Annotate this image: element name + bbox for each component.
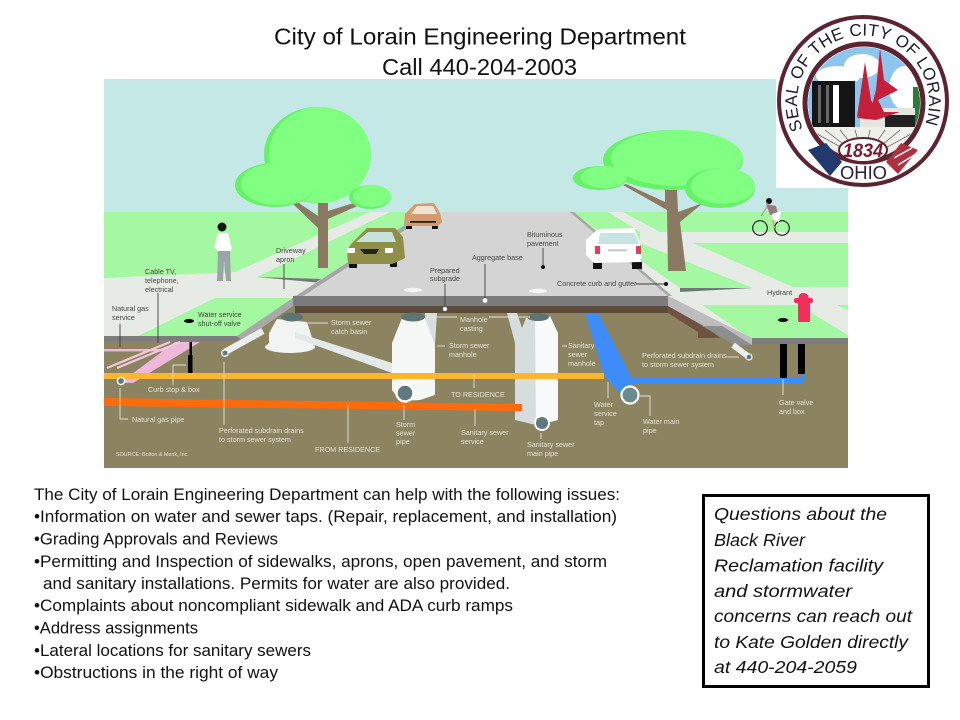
underground labels: service — [461, 437, 484, 446]
underground labels: catch basin — [331, 327, 367, 336]
underground labels: Water main — [643, 417, 679, 426]
left lawn and sidewalks — [104, 212, 440, 341]
surface labels: apron — [276, 255, 294, 264]
underground labels: manhole — [568, 359, 596, 368]
surface labels: telephone, — [145, 276, 179, 285]
surface labels: shut-off valve — [198, 319, 241, 328]
services list: and sanitary installations. Permits for water are also provided. — [43, 575, 510, 593]
infrastructure cutaway illustration — [104, 79, 848, 468]
underground labels: and box — [779, 407, 805, 416]
storm sewer catch basin — [265, 312, 392, 373]
underground labels: FROM RESIDENCE — [315, 445, 380, 454]
orange car — [404, 203, 442, 229]
surface labels: Hydrant — [767, 288, 792, 297]
surface labels: Prepared — [430, 266, 460, 275]
title: Call 440-204-2003 — [382, 54, 577, 80]
roadway — [237, 212, 672, 341]
underground labels: Sanitary sewer — [461, 428, 509, 437]
underground labels: Sanitary sewer — [527, 440, 575, 449]
services list: •Permitting and Inspection of sidewalks, aprons, open pavement, and storm — [34, 553, 607, 571]
surface labels: Natural gas — [112, 304, 149, 313]
gas and utility conduits — [104, 342, 200, 383]
white car — [586, 228, 642, 269]
fire hydrant — [794, 293, 813, 322]
services list: •Obstructions in the right of way — [34, 664, 279, 682]
surface labels — [112, 230, 792, 328]
right curb and gutter section — [668, 296, 752, 345]
underground labels: sewer — [396, 428, 416, 438]
callout leader lines — [120, 248, 783, 443]
callout: Black River Reclamation contact: concerns can reach out — [714, 606, 913, 626]
services list — [34, 486, 620, 682]
underground labels: Perforated subdrain drains — [642, 351, 727, 360]
seal ribbon and state name — [808, 143, 918, 183]
underground labels: main pipe — [527, 449, 558, 458]
seal central scene — [808, 47, 920, 154]
services list: •Lateral locations for sanitary sewers — [34, 642, 311, 660]
underground labels: SOURCE: Bolton & Menk, Inc. — [116, 452, 189, 458]
surface labels: subgrade — [430, 274, 460, 283]
seal ring lettering: SEAL OF THE CITY OF LORAIN — [785, 24, 941, 132]
surface labels: pavement — [527, 239, 559, 248]
underground labels: Storm — [396, 420, 415, 429]
underground soil — [104, 298, 848, 468]
underground labels: Gate valve — [779, 398, 813, 407]
surface labels: Bituminous — [527, 230, 563, 239]
callout: Black River Reclamation contact: Black River — [714, 530, 806, 550]
green car — [347, 228, 405, 268]
underground labels: to storm sewer system — [219, 435, 291, 444]
underground labels: Manhole — [460, 315, 488, 324]
shut-off valves — [184, 318, 788, 323]
underground labels: Water — [594, 400, 614, 409]
services list: •Information on water and sewer taps. (Repair, replacement, and installation) — [34, 508, 617, 526]
sanitary sewer manhole — [507, 313, 558, 426]
surface labels: service — [112, 313, 135, 322]
underground labels: Curb stop & box — [148, 385, 200, 394]
seal ribbon and state name: OHIO — [840, 163, 887, 183]
callout: Black River Reclamation contact: Reclamation facility — [714, 556, 884, 576]
services list: •Grading Approvals and Reviews — [34, 530, 278, 548]
sky — [104, 79, 848, 213]
left perforated drain — [222, 331, 263, 356]
surface labels: Cable TV, — [145, 267, 176, 276]
underground labels: to storm sewer system — [642, 360, 714, 369]
underground labels: Perforated subdrain drains — [219, 426, 304, 435]
underground labels: Storm sewer — [449, 341, 490, 350]
underground labels: pipe — [396, 437, 410, 446]
sewer service pipe: yellow — [104, 373, 604, 379]
surface labels: Concrete curb and gutter — [557, 279, 637, 288]
manhole covers — [404, 288, 547, 293]
pipe cross-sections — [117, 377, 638, 430]
callout: Black River Reclamation contact: and stormwater — [714, 581, 853, 601]
title — [274, 24, 687, 80]
right lawn and sidewalks — [570, 212, 848, 344]
left tree — [235, 107, 391, 268]
underground labels: Sanitary — [568, 341, 595, 350]
gate valve boxes — [780, 344, 805, 378]
services list: •Complaints about noncompliant sidewalk and ADA curb ramps — [34, 597, 513, 615]
person standing — [214, 222, 232, 281]
seal year: 1834 — [843, 141, 883, 162]
underground labels: TO RESIDENCE — [451, 390, 505, 399]
underground labels: casting — [460, 324, 483, 333]
callout: Black River Reclamation contact — [704, 496, 928, 686]
title: City of Lorain Engineering Department — [274, 24, 687, 50]
underground labels: tap — [594, 418, 604, 427]
seal of the City of Lorain — [776, 15, 949, 188]
underground labels: sewer — [568, 350, 588, 359]
seal outer rope ring — [779, 17, 947, 185]
storm sewer manhole — [392, 312, 437, 401]
services list: •Address assignments — [34, 620, 198, 638]
water service pipe — [585, 313, 805, 396]
water return pipe: orange — [104, 398, 522, 411]
callout: Black River Reclamation contact: to Kate Golden directly — [714, 632, 909, 652]
underground labels: Storm sewer — [331, 318, 372, 327]
underground labels: Natural gas pipe — [132, 415, 184, 424]
right tree — [573, 130, 755, 271]
callout: Black River Reclamation contact: at 440-204-2059 — [714, 657, 857, 677]
surface labels: Aggregate base — [472, 253, 523, 262]
surface labels: Driveway — [276, 246, 306, 255]
callout: Black River Reclamation contact: Questions about the — [714, 504, 887, 524]
underground labels: manhole — [449, 350, 477, 359]
underground labels: service — [594, 409, 617, 418]
underground labels: pipe — [643, 426, 657, 435]
cyclist — [753, 198, 789, 235]
underground labels — [116, 315, 813, 458]
services list: The City of Lorain Engineering Department can help with the following issues: — [34, 486, 620, 504]
surface labels: electrical — [145, 285, 174, 294]
surface labels: Water service — [198, 310, 242, 319]
right perforated drain — [733, 345, 752, 360]
